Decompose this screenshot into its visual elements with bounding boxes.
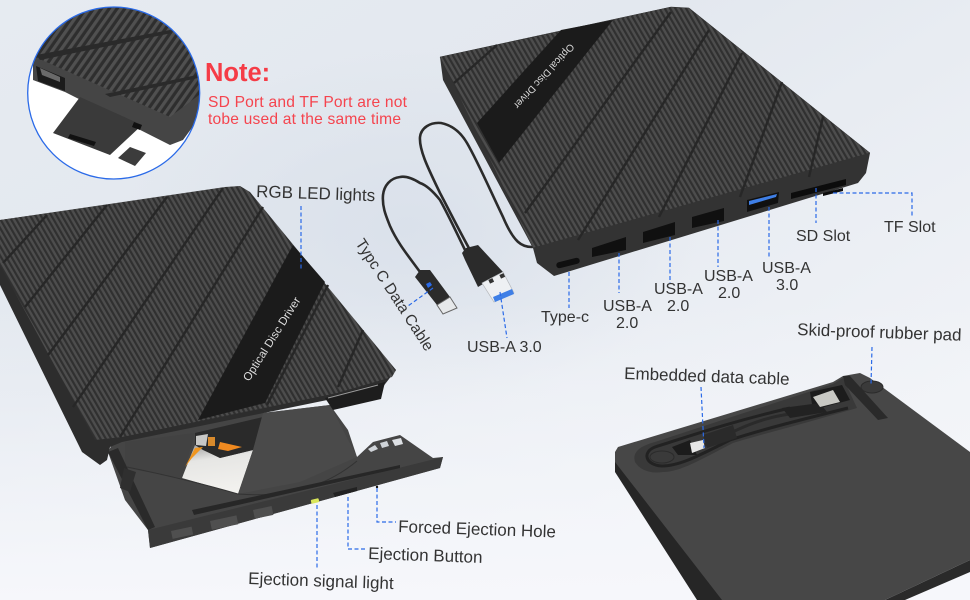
label: USB-A 3.0 cable: USB-A 3.0 [467, 339, 542, 356]
label: Ejection signal light: Ejection signal light [248, 569, 394, 593]
label: USB-A 2.0 second: 2.0 [667, 298, 689, 315]
label: Typc C Data Cable: Typc C Data Cable [352, 236, 437, 354]
label: Type-c: Type-c [541, 309, 589, 326]
label: Forced Ejection Hole: Forced Ejection Hole [398, 517, 556, 542]
top right drive [440, 7, 870, 276]
ejection signal light [311, 498, 319, 504]
label: Ejection Button: Ejection Button [368, 544, 483, 567]
printed band with label [198, 245, 325, 420]
left drive [0, 186, 396, 465]
printed band with label: Optical Disc Driver [241, 295, 304, 384]
ejection button [333, 487, 357, 497]
rubber pads [650, 381, 883, 463]
forced ejection hole [376, 486, 378, 488]
dashed leader lines [301, 188, 912, 568]
ports [556, 179, 846, 269]
USB-C connector [415, 270, 457, 314]
data cables [383, 123, 532, 272]
label: SD Slot: SD Slot [796, 228, 851, 245]
label: USB-A 2.0 third: 2.0 [718, 285, 740, 302]
labels [248, 182, 962, 593]
note text line 2: tobe used at the same time [208, 111, 401, 128]
USB-A 3.0 connector [462, 245, 514, 302]
disc tray [108, 405, 443, 548]
bottom right drive underside [615, 373, 970, 600]
note text: SD Port and TF Port are not [208, 94, 408, 111]
label: RGB LED lights: RGB LED lights [256, 182, 375, 205]
note heading: Note: [205, 59, 270, 87]
cable recess [634, 378, 857, 473]
laser mechanism opening [182, 417, 263, 494]
label: USB-A 2.0 third: USB-A [704, 268, 753, 285]
printed band with label [477, 20, 613, 163]
label: Skid-proof rubber pad: Skid-proof rubber pad [797, 320, 962, 345]
label: USB-A 3.0 port: 3.0 [776, 277, 798, 294]
embedded data cable [647, 390, 848, 466]
printed band with label: Optical Disc Driver [510, 41, 576, 111]
label: TF Slot: TF Slot [884, 219, 936, 236]
label: USB-A 2.0 first: 2.0 [616, 315, 638, 332]
disc panel logos [171, 506, 273, 539]
label: Embedded data cable: Embedded data cable [624, 364, 790, 389]
inset circle: SD and TF card detail [27, 6, 200, 180]
label: USB-A 2.0 second: USB-A [654, 281, 703, 298]
label: USB-A 2.0 first: USB-A [603, 298, 652, 315]
label: USB-A 3.0 port: USB-A [762, 260, 811, 277]
